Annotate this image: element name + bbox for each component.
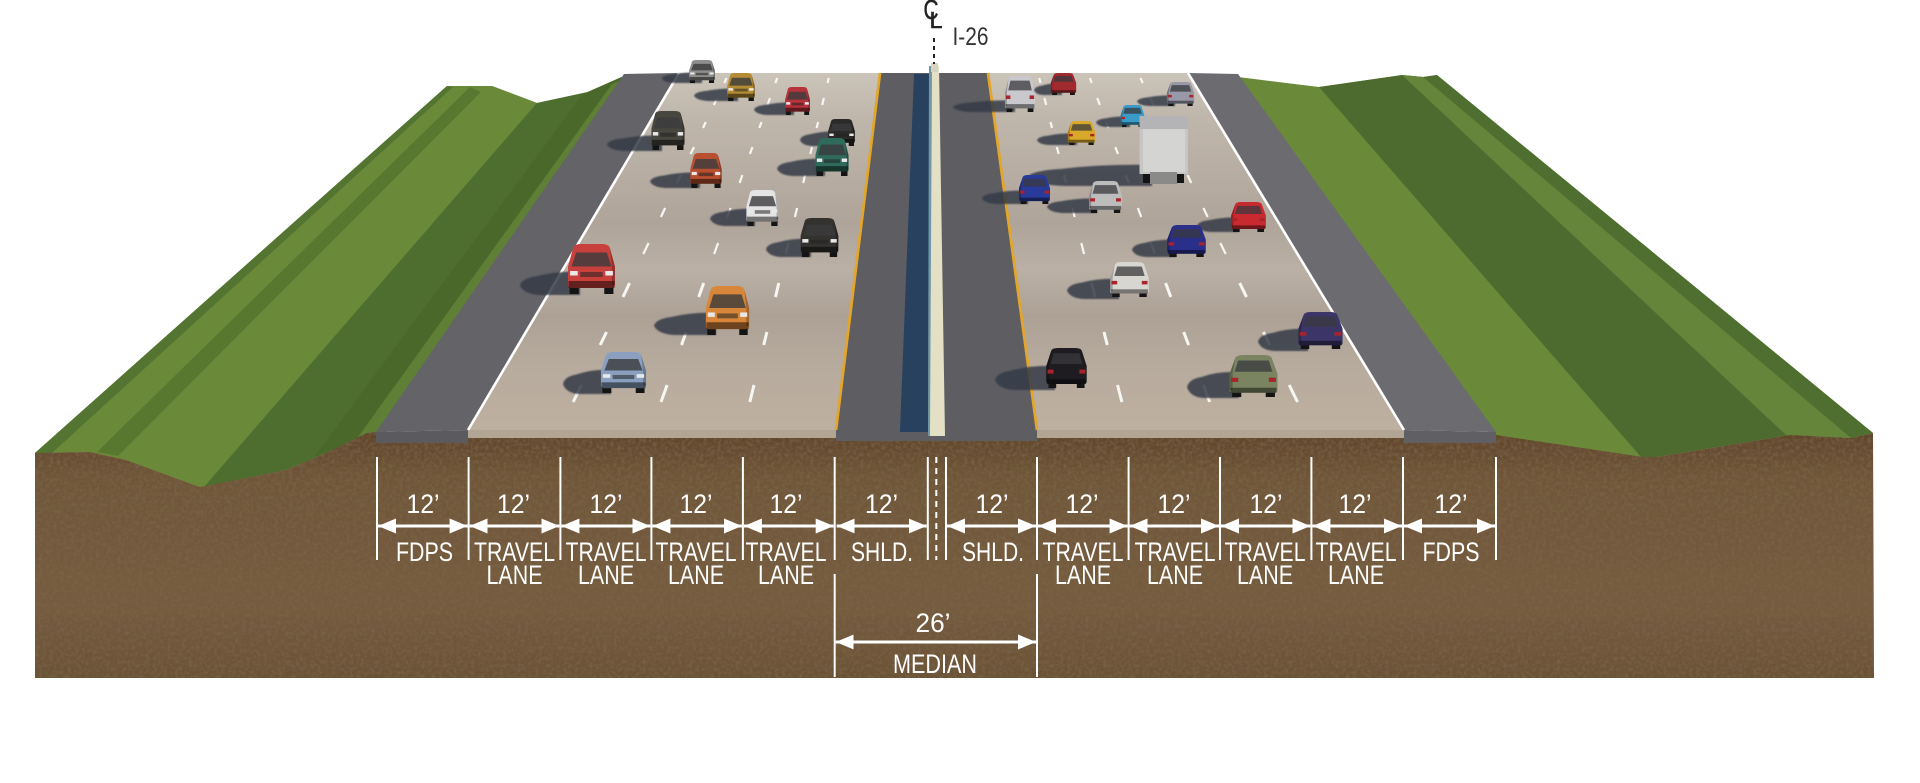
car: black sedan xyxy=(766,218,838,257)
lane labels: SHLD. xyxy=(851,537,913,567)
cars, left carriageway xyxy=(520,60,855,394)
car: yellow xyxy=(1037,121,1095,145)
cars, right carriageway xyxy=(953,73,1343,398)
dimension values: 12’ xyxy=(1338,489,1372,519)
lane labels xyxy=(396,537,1480,679)
lane labels: LANE xyxy=(1055,560,1111,590)
car: silver xyxy=(1047,181,1122,213)
centerline symbol and label xyxy=(924,0,988,64)
car: dark red xyxy=(1034,73,1076,95)
lane labels: LANE xyxy=(578,560,634,590)
median shoulders, ditch and barrier xyxy=(836,63,1037,441)
route label: I-26 xyxy=(952,23,988,51)
left outside paved shoulder xyxy=(376,73,679,443)
lane labels: TRAVEL xyxy=(1316,537,1396,567)
dimension values: 12’ xyxy=(1250,489,1282,519)
dimension values: 12’ xyxy=(770,489,802,519)
lane labels: LANE xyxy=(758,560,814,590)
lane labels: FDPS xyxy=(1422,537,1480,567)
lane labels: TRAVEL xyxy=(656,537,736,567)
dimension values: 12’ xyxy=(497,489,530,519)
lane labels: TRAVEL xyxy=(1224,537,1306,567)
lane labels: TRAVEL xyxy=(474,537,555,567)
lane labels: TRAVEL xyxy=(1134,537,1216,567)
car: red xyxy=(1197,202,1266,232)
lane labels: LANE xyxy=(1328,560,1384,590)
car: light blue xyxy=(563,352,646,394)
car: red suv xyxy=(520,244,615,295)
left grass embankment xyxy=(35,76,632,487)
dimension values: 12’ xyxy=(1158,489,1190,519)
car: orange xyxy=(654,286,749,335)
centerline dashes xyxy=(933,38,935,64)
lane labels: TRAVEL xyxy=(566,537,646,567)
car: gray xyxy=(662,60,715,83)
car: gray purple xyxy=(1137,82,1194,106)
car: dark suv xyxy=(607,111,685,151)
dimension arrows xyxy=(378,526,1495,642)
lane dashes left xyxy=(573,78,829,402)
centerline L glyph: L xyxy=(930,7,943,33)
dimension values: 26’ xyxy=(916,608,950,638)
lane dashes right xyxy=(1039,78,1298,402)
lane labels: TRAVEL xyxy=(1042,537,1124,567)
van: white xyxy=(953,76,1035,112)
soil cross-section xyxy=(35,432,1874,678)
right concrete travel lanes xyxy=(988,73,1404,438)
car: blue xyxy=(982,175,1050,204)
car: red xyxy=(754,87,810,115)
car: purple xyxy=(1258,312,1343,351)
truck: box truck xyxy=(1027,116,1188,186)
lane labels: LANE xyxy=(668,560,724,590)
lane labels: LANE xyxy=(1147,560,1203,590)
dimension values: 12’ xyxy=(590,489,622,519)
left concrete travel lanes xyxy=(468,73,880,438)
dimension ticks xyxy=(377,457,1496,677)
dimension values: 12’ xyxy=(1066,489,1098,519)
car: black xyxy=(800,119,855,146)
car: white xyxy=(710,190,779,226)
lane labels: LANE xyxy=(486,560,542,590)
car: tan xyxy=(694,73,755,101)
dimension values: 12’ xyxy=(406,489,440,519)
dimension values: 12’ xyxy=(976,489,1008,519)
lane labels: SHLD. xyxy=(962,537,1024,567)
car: light blue xyxy=(1096,105,1144,127)
lane labels: MEDIAN xyxy=(893,649,977,679)
car: navy xyxy=(1132,225,1206,257)
right outside paved shoulder xyxy=(1188,73,1496,443)
car: rust orange xyxy=(650,153,722,188)
car: green xyxy=(777,138,849,176)
car: white sedan xyxy=(1067,262,1149,299)
dimension values xyxy=(406,489,1468,638)
dimension values: 12’ xyxy=(865,489,898,519)
right grass embankment xyxy=(1230,75,1873,457)
dimension values: 12’ xyxy=(680,489,712,519)
car: black suv xyxy=(995,348,1087,390)
car: olive xyxy=(1187,355,1277,398)
dimension values: 12’ xyxy=(1434,489,1468,519)
lane labels: TRAVEL xyxy=(746,537,826,567)
lane labels: LANE xyxy=(1237,560,1293,590)
lane labels: FDPS xyxy=(396,537,453,567)
